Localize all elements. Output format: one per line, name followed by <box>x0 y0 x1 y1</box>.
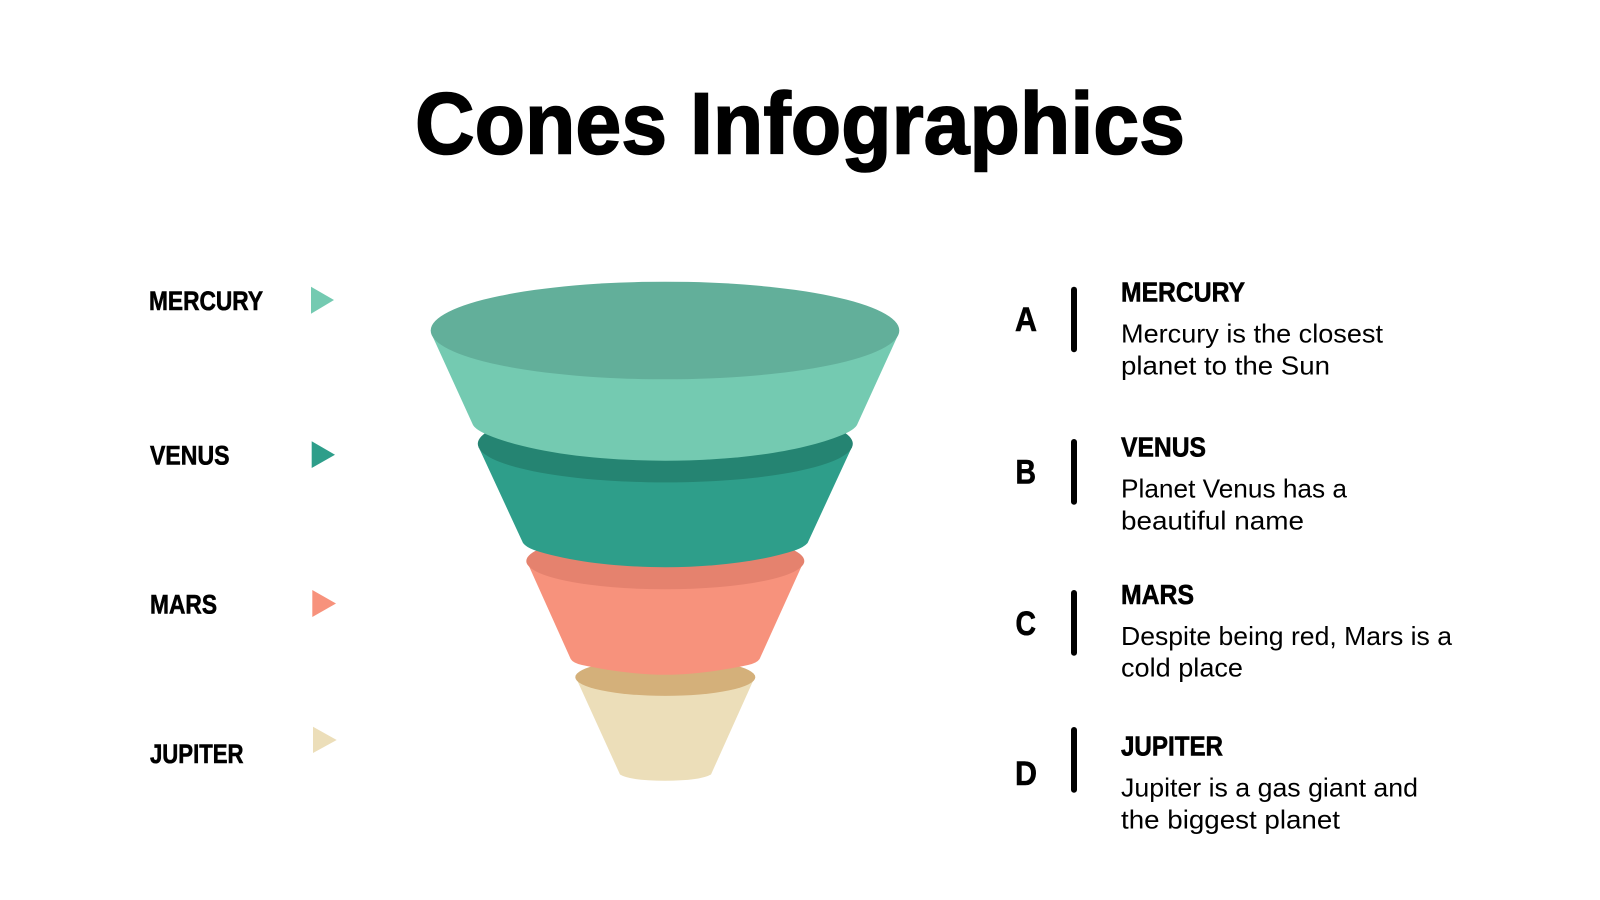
label: Mercury: MERCURY <box>149 286 263 316</box>
panel: Jupiter description <box>1015 727 1418 834</box>
text: Mars description: cold place <box>1121 653 1243 683</box>
cone layer: Mars <box>526 533 804 675</box>
arrow: Mercury <box>311 287 334 314</box>
panel: Venus description <box>1016 432 1348 535</box>
panel: Mars description <box>1016 579 1453 683</box>
heading: Jupiter: JUPITER <box>1121 730 1223 762</box>
text: Venus description: Planet Venus has a <box>1121 474 1348 504</box>
letter A: A <box>1015 301 1037 339</box>
title: Cones Infographics <box>415 76 1185 172</box>
letter B: B <box>1016 453 1036 491</box>
divider bar A <box>1071 287 1077 352</box>
text: Mercury description: Mercury is the closest <box>1121 319 1384 349</box>
arrow: Venus <box>312 441 335 468</box>
cone layer: Jupiter <box>575 658 755 781</box>
arrow: Mars <box>312 590 336 617</box>
text: Jupiter description: Jupiter is a gas giant and <box>1121 773 1418 803</box>
left labels with arrows <box>149 286 337 769</box>
heading: Venus: VENUS <box>1121 432 1206 462</box>
funnel cone chart <box>431 282 899 781</box>
divider bar C <box>1071 590 1077 656</box>
panel: Mercury description <box>1015 276 1384 380</box>
text: Venus description: beautiful name <box>1121 505 1304 535</box>
letter C: C <box>1016 605 1036 643</box>
text: Mars description: Despite being red, Mars is a <box>1121 621 1453 651</box>
heading: Mercury: MERCURY <box>1121 276 1245 308</box>
label: Jupiter: JUPITER <box>150 739 244 769</box>
cone layer: Venus <box>478 405 853 567</box>
arrow: Jupiter <box>313 727 337 753</box>
text: Mercury description: planet to the Sun <box>1121 350 1330 380</box>
cone layer: Mercury <box>431 282 899 461</box>
label: Venus: VENUS <box>150 440 230 470</box>
label: Mars: MARS <box>150 589 217 619</box>
heading: Mars: MARS <box>1121 579 1194 610</box>
divider bar B <box>1071 439 1077 505</box>
divider bar D <box>1071 727 1077 793</box>
text: Jupiter description: the biggest planet <box>1121 804 1341 834</box>
letter D: D <box>1015 755 1037 793</box>
